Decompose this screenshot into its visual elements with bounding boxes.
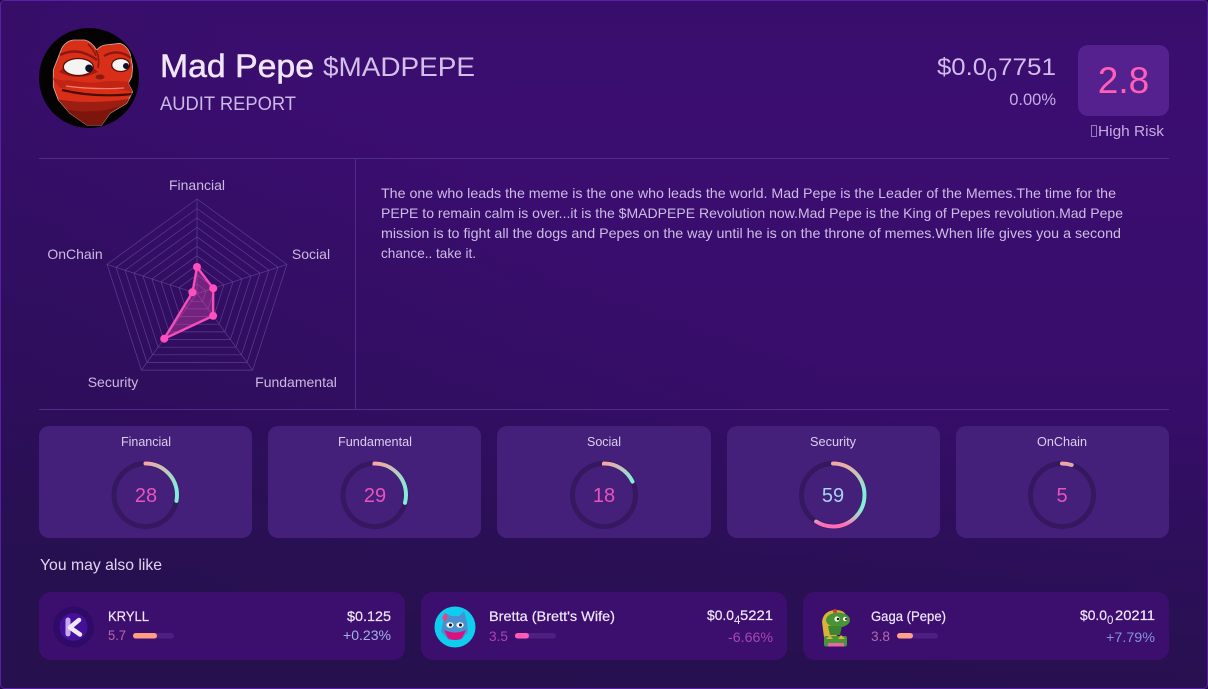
icon: Bretta avatar [434, 606, 476, 648]
header: price: $0.0 [937, 54, 987, 81]
score bar [515, 633, 556, 638]
token name: Mad Pepe [160, 48, 314, 84]
description text [381, 185, 1123, 261]
panel: OnChain score: OnChain [1037, 434, 1087, 449]
card: Bretta: $0.0 [707, 607, 734, 623]
panel: Security score: Security [810, 434, 856, 449]
gauge: Social 18 [572, 464, 636, 526]
panel: Security score: 59 [822, 485, 844, 507]
header: price: 0 [987, 65, 997, 85]
gauge: OnChain 5 [1030, 464, 1094, 526]
card: Bretta: 3.5 [489, 628, 508, 644]
radar axis labels: Financial [169, 177, 225, 193]
panel: Fundamental score: Fundamental [338, 434, 412, 449]
panel: Fundamental score: 29 [364, 485, 386, 507]
panel: Financial score: 28 [135, 485, 157, 507]
card: Gaga: 20211 [1115, 607, 1155, 623]
risk score badge [1078, 45, 1169, 116]
subtitle: AUDIT REPORT [160, 93, 296, 115]
heading: you may also like: You may also like [40, 557, 162, 574]
card: Gaga: 0 [1107, 615, 1113, 627]
panel: Financial score: Financial [121, 434, 171, 449]
card: Bretta: Bretta (Brett's Wife) [489, 608, 615, 624]
header: price: 0.00% [1009, 91, 1056, 109]
header: price: 7751 [998, 54, 1056, 81]
radar axis labels: Fundamental [255, 374, 337, 390]
card: KRYLL: 5.7 [108, 627, 126, 643]
gauge: Security 59 [802, 464, 864, 526]
radar data shape [160, 263, 217, 343]
card: Gaga: Gaga (Pepe) [871, 608, 946, 624]
description text: The one who leads the meme is the one who leads the world. Mad Pepe is the Leader of the Memes.The time for the [381, 185, 1116, 201]
card: KRYLL: $0.125 [347, 608, 391, 624]
icon: KRYLL logo [53, 606, 94, 648]
risk label: High Risk [1098, 123, 1165, 140]
radar axis labels: Social [292, 246, 330, 262]
token ticker: $MADPEPE [323, 52, 475, 82]
radar chart [47, 177, 337, 390]
description text: chance.. take it. [381, 245, 476, 261]
description text: mission is to fight all the dogs and Pepes on the way until he is on the throne of memes.When life gives you a second [381, 225, 1121, 241]
header: price [937, 54, 1056, 109]
panel: Social score [497, 426, 711, 538]
card: KRYLL [39, 592, 405, 660]
icon: Gaga avatar [822, 609, 850, 646]
card: KRYLL: KRYLL [108, 608, 149, 624]
icon: Mad Pepe avatar [39, 28, 139, 130]
card: Bretta: 4 [734, 615, 741, 627]
card: KRYLL: +0.23% [343, 627, 391, 643]
header: token identity [39, 28, 475, 130]
risk score badge: 2.8 [1098, 60, 1149, 101]
panel: OnChain score: 5 [1056, 485, 1068, 507]
card: Gaga [803, 592, 1169, 660]
radar axis labels: OnChain [47, 246, 103, 262]
score bar [133, 633, 174, 638]
radar axis labels [47, 177, 337, 390]
card: Gaga: +7.79% [1106, 629, 1155, 645]
panel: Security score [727, 426, 940, 538]
gauge: Fundamental 29 [343, 464, 406, 526]
description text: PEPE to remain calm is over...it is the $MADPEPE Revolution now.Mad Pepe is the King of Pepes revolution.Mad Pepe [381, 205, 1123, 221]
card: Bretta [421, 592, 787, 660]
radar axis labels: Security [88, 374, 138, 390]
score bar [897, 633, 938, 638]
card: Gaga: 3.8 [871, 628, 890, 644]
panel: Financial score [39, 426, 252, 538]
panel: Social score: Social [587, 434, 621, 449]
card: Bretta: -6.66% [728, 629, 773, 645]
card: Gaga: $0.0 [1080, 607, 1107, 623]
panel: OnChain score [956, 426, 1169, 538]
gauge: Financial 28 [114, 464, 177, 526]
card: Bretta: 5221 [740, 607, 773, 623]
panel: Fundamental score [268, 426, 481, 538]
radar grid [107, 199, 287, 370]
panel: Social score: 18 [593, 485, 615, 507]
